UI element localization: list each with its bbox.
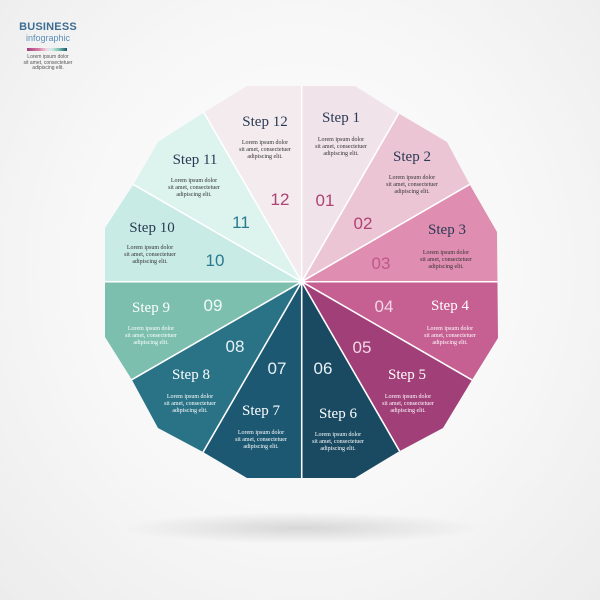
step 7 label: adipiscing elit. — [243, 444, 279, 450]
wedge 3 — [304, 184, 498, 281]
wedge 2 — [304, 114, 470, 280]
step 9 label: sit amet, consectetuer — [125, 333, 177, 339]
step 9 label: Step 9 — [132, 300, 170, 316]
number 04: 04 — [375, 297, 393, 316]
step 5 label: Step 5 — [388, 367, 426, 383]
header title: BUSINESS — [19, 21, 77, 33]
step 6 label: Step 6 — [319, 406, 357, 422]
step 1 label: Lorem ipsum dolor — [318, 137, 364, 143]
number 08: 08 — [226, 337, 244, 356]
wedge 10 — [105, 185, 298, 281]
step 12 label: Lorem ipsum dolor — [242, 140, 288, 146]
floor shadow — [121, 512, 481, 544]
step 3 label: Step 3 — [428, 222, 466, 238]
step 12 label — [239, 114, 291, 160]
step 1 label: sit amet, consectetuer — [315, 144, 367, 150]
step 9 label — [125, 300, 177, 346]
wedge 9 — [105, 282, 300, 380]
step 6 label: Lorem ipsum dolor — [315, 432, 361, 438]
step 9 label: Lorem ipsum dolor — [128, 326, 174, 332]
step 8 label: Step 8 — [172, 367, 210, 383]
step 8 label: sit amet, consectetuer — [164, 401, 216, 407]
number 11: 11 — [232, 213, 250, 232]
wedge 7 — [203, 284, 302, 478]
header block — [19, 21, 77, 71]
step 2 label: sit amet, consectetuer — [386, 182, 438, 188]
step 4 label: sit amet, consectetuer — [424, 333, 476, 339]
step 3 label: Lorem ipsum dolor — [423, 250, 469, 256]
step 8 label — [164, 367, 216, 414]
step 4 label: Step 4 — [431, 298, 469, 314]
step 3 label: adipiscing elit. — [428, 264, 464, 270]
wedge 4 — [305, 282, 498, 380]
step 12 label: adipiscing elit. — [247, 154, 283, 160]
step 5 label: Lorem ipsum dolor — [385, 394, 431, 400]
step 10 label: Step 10 — [129, 220, 175, 236]
step 4 label: Lorem ipsum dolor — [427, 326, 473, 332]
wedge 5 — [304, 282, 472, 452]
step 8 label: Lorem ipsum dolor — [167, 394, 213, 400]
step 3 label — [420, 222, 472, 270]
number 09: 09 — [204, 296, 222, 315]
wedge 12 — [204, 86, 301, 278]
header subtitle: infographic — [26, 33, 70, 43]
step 9 label: adipiscing elit. — [133, 340, 169, 346]
wedge 11 — [133, 113, 300, 281]
step 12 label: Step 12 — [242, 114, 288, 130]
step 2 label: Step 2 — [393, 149, 431, 165]
step 5 label — [382, 367, 434, 414]
step 11 label: Lorem ipsum dolor — [171, 178, 217, 184]
dodecagon wheel — [105, 86, 498, 478]
step 6 label — [312, 406, 364, 452]
step 1 label: Step 1 — [322, 110, 360, 126]
step 11 label — [168, 152, 220, 198]
step 4 label: adipiscing elit. — [432, 340, 468, 346]
step 6 label: sit amet, consectetuer — [312, 439, 364, 445]
number 01: 01 — [316, 191, 334, 210]
number 10: 10 — [206, 251, 224, 270]
number 05: 05 — [353, 338, 371, 357]
step 6 label: adipiscing elit. — [320, 446, 356, 452]
step 2 label — [386, 149, 438, 195]
step 11 label: sit amet, consectetuer — [168, 185, 220, 191]
step 2 label: Lorem ipsum dolor — [389, 175, 435, 181]
wedge 1 — [302, 86, 398, 278]
step 7 label: Lorem ipsum dolor — [238, 430, 284, 436]
number 12: 12 — [271, 190, 289, 209]
number 07: 07 — [268, 359, 286, 378]
number 06: 06 — [314, 359, 332, 378]
header lorem text: Lorem ipsum dolor — [27, 54, 69, 60]
header lorem text — [24, 54, 72, 71]
step 7 label: Step 7 — [242, 403, 280, 419]
step 11 label: adipiscing elit. — [176, 192, 212, 198]
step 5 label: sit amet, consectetuer — [382, 401, 434, 407]
header lorem text: adipiscing elit. — [32, 65, 64, 71]
step 7 label — [235, 403, 287, 450]
step 10 label: adipiscing elit. — [132, 259, 168, 265]
step 10 label: sit amet, consectetuer — [124, 252, 176, 258]
step 7 label: sit amet, consectetuer — [235, 437, 287, 443]
number 03: 03 — [372, 254, 390, 273]
number 02: 02 — [354, 214, 372, 233]
step 10 label — [124, 220, 176, 265]
step 8 label: adipiscing elit. — [172, 408, 208, 414]
step 3 label: sit amet, consectetuer — [420, 257, 472, 263]
header lorem text: sit amet, consectetuer — [24, 60, 72, 66]
step 5 label: adipiscing elit. — [390, 408, 426, 414]
step 11 label: Step 11 — [173, 152, 217, 168]
color legend bar — [27, 48, 67, 51]
step 12 label: sit amet, consectetuer — [239, 147, 291, 153]
wedge 6 — [302, 284, 400, 478]
step 10 label: Lorem ipsum dolor — [127, 245, 173, 251]
step 4 label — [424, 298, 476, 346]
step 1 label: adipiscing elit. — [323, 151, 359, 157]
step 1 label — [315, 110, 367, 157]
wedge 8 — [132, 284, 301, 452]
step 2 label: adipiscing elit. — [394, 189, 430, 195]
